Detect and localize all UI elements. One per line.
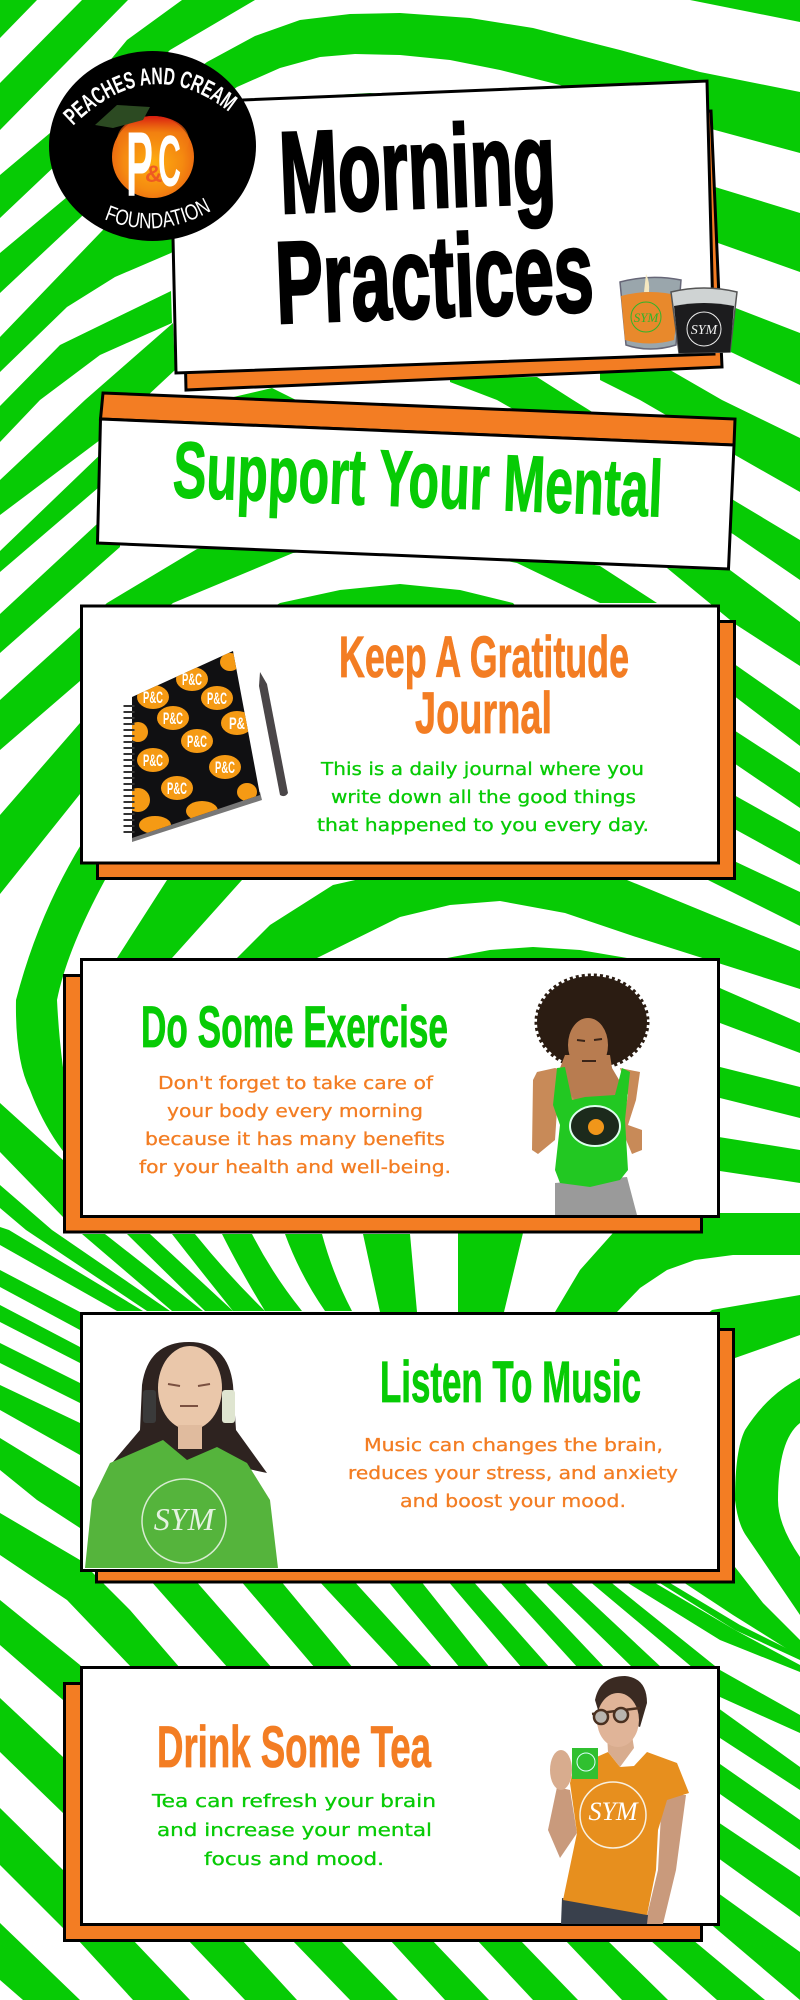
photo: woman with mug [548, 1676, 689, 1924]
body text: that happened to you every day. [317, 815, 649, 836]
subtitle panel [98, 393, 735, 569]
orange candle: SYM [634, 310, 659, 325]
peach: C [158, 122, 181, 202]
icon: notebook: P&C [143, 751, 163, 770]
card 1: gratitude journal [82, 606, 734, 878]
logo arc text bottom: FOUNDATION [105, 198, 210, 228]
heading line 2: Journal [415, 681, 552, 746]
body text: for your health and well-being. [139, 1157, 451, 1178]
icon: notebook: P&C [143, 688, 163, 707]
body text: because it has many benefits [145, 1129, 445, 1150]
photo: woman with headphones: SYM [154, 1501, 217, 1537]
body text: Tea can refresh your brain [151, 1791, 436, 1812]
body text: This is a daily journal where you [320, 759, 644, 780]
peach: & [145, 161, 162, 188]
icon: notebook: P&C [167, 779, 187, 798]
black candle: SYM [691, 323, 719, 338]
body text [139, 1073, 451, 1178]
heading: Do Some Exercise [141, 995, 448, 1060]
title: Morning: Morning [277, 97, 558, 238]
body text: your body every morning [167, 1101, 423, 1122]
body text [151, 1791, 436, 1870]
heading: Keep A Gratitude [339, 625, 629, 690]
icon: notebook [126, 651, 262, 842]
logo: Peaches and Cream Foundation [49, 51, 256, 241]
icon: notebook: P&C [207, 689, 227, 708]
body text: and increase your mental [157, 1820, 432, 1841]
body text: focus and mood. [204, 1849, 384, 1870]
icon: notebook: P&C [182, 670, 202, 689]
logo arc text top: PEACHES AND CREAM [62, 68, 238, 126]
icon: pencil [259, 672, 288, 796]
peach: P [126, 114, 153, 216]
peach [95, 105, 194, 216]
icon: notebook: P& [229, 714, 245, 733]
title panel [170, 81, 722, 390]
photo: woman with headphones [85, 1342, 278, 1568]
body text: Don't forget to take care of [158, 1073, 434, 1094]
card 3: music [82, 1314, 734, 1582]
card 2: exercise [64, 960, 718, 1232]
body text: reduces your stress, and anxiety [348, 1463, 678, 1484]
icon: notebook: P&C [215, 758, 235, 777]
photo: woman with mug: SYM [588, 1797, 639, 1826]
icon: notebook: P&C [163, 709, 183, 728]
candles [620, 274, 737, 353]
photo: runner [532, 976, 647, 1215]
heading: Drink Some Tea [157, 1715, 431, 1780]
title: Practices: Practices [273, 206, 596, 348]
body text: write down all the good things [331, 787, 636, 808]
body text [317, 759, 649, 836]
body text: Music can changes the brain, [364, 1435, 663, 1456]
icon: notebook: P&C [187, 732, 207, 751]
card 4: tea [64, 1668, 718, 1940]
body text [348, 1435, 678, 1512]
body text: and boost your mood. [400, 1491, 626, 1512]
